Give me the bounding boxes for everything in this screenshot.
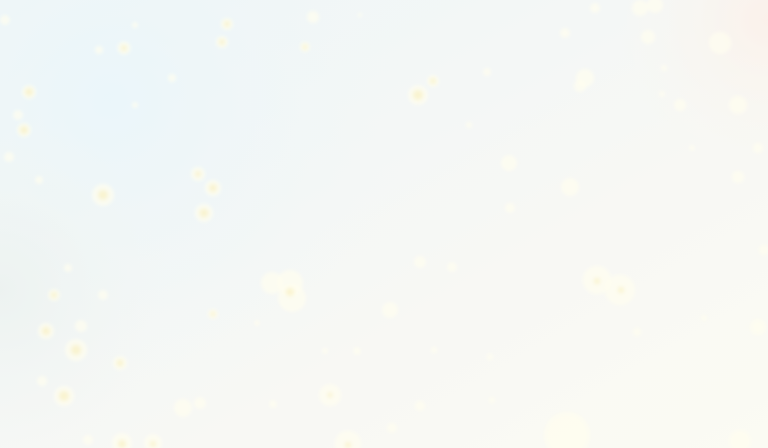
yellow blossom centres bbox=[20, 21, 624, 448]
